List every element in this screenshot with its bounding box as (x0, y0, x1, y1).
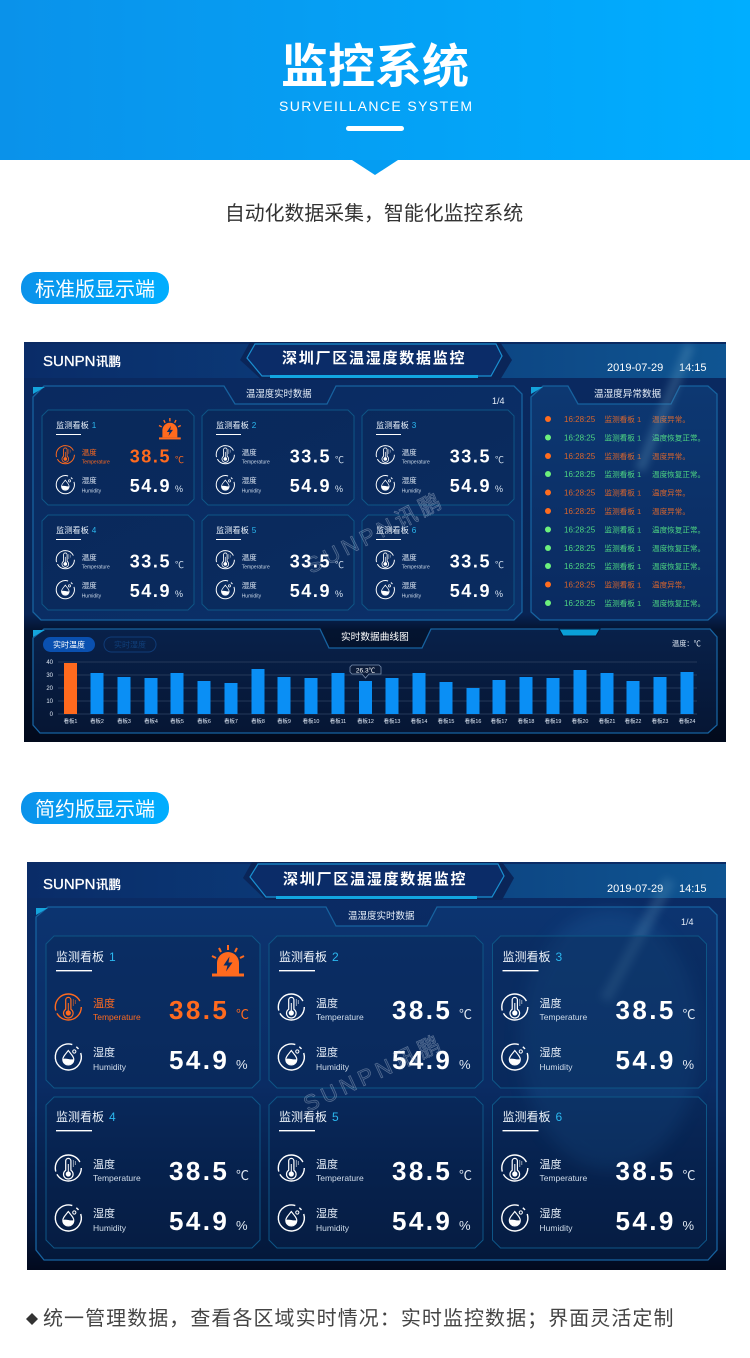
card 6: Temperature (402, 564, 430, 570)
card 4: ℃ (175, 560, 184, 570)
panel: realtime data: 温湿度实时数据 (246, 388, 312, 399)
logo (44, 878, 120, 890)
section pill: simple display: 简约版显示端 (35, 798, 155, 821)
section pill: standard display (21, 272, 169, 304)
log row 8: 温度恢复正常。 (652, 543, 705, 553)
card 4: 湿度 (82, 580, 97, 590)
log row 5: 16:28:25 (564, 488, 596, 498)
log row 2 (545, 434, 700, 442)
large card 4: Temperature (93, 1173, 141, 1183)
date and time: 2019-07-29 (607, 362, 663, 374)
gridlines and axis: 40 (46, 660, 54, 666)
large card 2: Humidity (316, 1062, 350, 1072)
card 5: ℃ (335, 560, 344, 570)
logo (44, 355, 120, 368)
large card 2 (269, 936, 483, 1088)
large card 3: 38.5 (616, 995, 676, 1025)
panel: realtime data large (36, 880, 717, 1260)
log row 10: 16:28:25 (564, 580, 596, 590)
log row 11: 温度恢复正常。 (652, 598, 705, 608)
log row 9: 16:28:25 (564, 562, 596, 571)
bar labels: 看板12 (357, 717, 374, 725)
large card 4 (46, 1097, 260, 1248)
log row 3: 监测看板 1 (604, 451, 641, 461)
large card 3: 监测看板 3 (502, 950, 563, 964)
log row 3: 温度异常。 (652, 451, 690, 461)
card 3: % (495, 484, 503, 494)
subtitle text: 自动化数据采集，智能化监控系统 (225, 202, 523, 225)
large card 2: Temperature (316, 1012, 364, 1022)
logo: SUNPN (43, 353, 96, 370)
card 1: 监测看板 1 (56, 420, 97, 430)
card 2: % (335, 484, 343, 494)
log row 11 (545, 600, 700, 607)
panel: bar chart: 实时数据曲线图 (341, 630, 409, 643)
logo: 讯鹏 (96, 877, 121, 892)
panel: abnormal data list (531, 386, 717, 620)
bar labels: 看板3 (117, 717, 131, 725)
card 5 (202, 515, 354, 610)
log row 6: 温度异常。 (652, 506, 690, 516)
card 6: Humidity (402, 594, 422, 600)
large card 3: ℃ (682, 1007, 696, 1022)
card 2: 温度 (242, 447, 257, 457)
card 1: 38.5 (130, 447, 171, 467)
card 5: Temperature (242, 564, 270, 570)
bar labels: 看板23 (652, 717, 668, 725)
light streak (640, 345, 690, 470)
log row 2: 温度恢复正常。 (652, 432, 705, 442)
bar labels: 看板5 (170, 717, 184, 725)
card 4: Temperature (82, 564, 110, 570)
large card 3: Temperature (540, 1012, 587, 1022)
large card 1: % (236, 1057, 248, 1072)
card 6 (362, 515, 514, 610)
panel: realtime data: 1/4 (492, 396, 505, 406)
section pill: standard display: 标准版显示端 (35, 278, 155, 301)
large card 4: % (236, 1218, 248, 1233)
date and time: 14:15 (679, 362, 707, 374)
large card 3: Humidity (540, 1062, 573, 1072)
section pill: simple display (21, 792, 169, 824)
card 6: 54.9 (450, 581, 491, 601)
icon: alarm (159, 418, 181, 439)
card 4 (42, 515, 194, 610)
large card 1: ℃ (236, 1007, 249, 1022)
large card 1 (46, 936, 260, 1088)
large card 2: ℃ (459, 1007, 472, 1022)
card 1: ℃ (175, 455, 184, 465)
large card 6: Temperature (540, 1173, 587, 1183)
bar labels: 看板11 (330, 717, 346, 725)
panel: realtime data (33, 386, 522, 620)
card 1: 湿度 (82, 475, 97, 485)
large card 1: Temperature (93, 1012, 141, 1022)
log row 6: 16:28:25 (564, 507, 596, 516)
dashboard title plate: 深圳厂区温湿度数据监控 (282, 349, 466, 367)
large card 1: 湿度 (93, 1045, 115, 1059)
card 4: 温度 (82, 552, 97, 562)
large card 4: ℃ (236, 1168, 249, 1183)
large card 5: ℃ (459, 1168, 472, 1183)
large card 4: 湿度 (93, 1206, 115, 1220)
large card 5: 54.9 (392, 1206, 452, 1236)
dashboard title plate (243, 862, 514, 900)
large card 1: Humidity (93, 1062, 127, 1072)
bar labels: 看板14 (411, 717, 427, 725)
tooltip: 26.3℃ (356, 666, 376, 674)
card 5: 33.5 (290, 552, 331, 572)
card 5: % (335, 589, 343, 599)
card 6: 温度 (402, 552, 417, 562)
card 3: ℃ (495, 455, 504, 465)
card 3: 54.9 (450, 476, 491, 496)
log row 11: 16:28:25 (564, 599, 596, 608)
card 6: % (495, 589, 503, 599)
card 1: Humidity (82, 488, 102, 494)
large card 1: 监测看板 1 (56, 950, 116, 964)
panel: abnormal data list: 温湿度异常数据 (594, 388, 662, 400)
bar labels: 看板1 (64, 717, 77, 725)
log row 3 (545, 452, 685, 460)
log row 4: 温度恢复正常。 (652, 469, 705, 479)
log row 9: 监测看板 1 (604, 561, 641, 571)
panel: bar chart (33, 629, 717, 733)
bar labels: 看板21 (599, 717, 615, 725)
gridlines and axis: 10 (46, 699, 54, 705)
log row 5: 监测看板 1 (604, 488, 641, 498)
bar labels: 看板15 (438, 717, 454, 725)
card 5: Humidity (242, 594, 262, 600)
log row 9: 温度恢复正常。 (652, 561, 705, 571)
log row 8: 16:28:25 (564, 544, 596, 553)
large card 4: 38.5 (169, 1156, 229, 1186)
title underline (346, 126, 404, 131)
large card 6: 监测看板 6 (502, 1110, 563, 1124)
card 4: 33.5 (130, 552, 171, 572)
card 4: % (175, 589, 183, 599)
large card 5: 38.5 (392, 1156, 452, 1186)
large card 5 (269, 1097, 483, 1248)
log row 2: 16:28:25 (564, 434, 596, 442)
card 6: 监测看板 6 (376, 525, 417, 535)
date and time: 2019-07-29 (607, 883, 663, 895)
tab buttons: 实时温度 (53, 640, 85, 650)
large card 2: 监测看板 2 (279, 950, 339, 964)
card 2: ℃ (335, 455, 344, 465)
card 2: 监测看板 2 (216, 420, 257, 430)
gridlines and axis (46, 660, 697, 718)
large card 6: % (682, 1218, 694, 1233)
log row 10 (545, 581, 685, 588)
large card 1: 54.9 (169, 1045, 229, 1075)
card 3: Humidity (402, 488, 422, 494)
log row 4: 16:28:25 (564, 470, 596, 479)
bar labels: 看板24 (679, 717, 695, 725)
english subtitle: SURVEILLANCE SYSTEM (279, 98, 472, 114)
card 3: 湿度 (402, 475, 417, 485)
large card 3: 54.9 (616, 1045, 676, 1075)
log row 1: 监测看板 1 (604, 414, 641, 424)
large card 2: 38.5 (392, 995, 452, 1025)
large card 3: 湿度 (540, 1045, 562, 1059)
large card 6: 54.9 (616, 1206, 676, 1236)
bar labels: 看板6 (197, 717, 211, 725)
panel: realtime data large: 1/4 (681, 917, 694, 927)
bar labels: 看板9 (277, 717, 291, 725)
card 2: 33.5 (290, 447, 331, 467)
card 1: Temperature (82, 460, 110, 466)
log row 5 (545, 489, 685, 496)
dashboard: simple display (27, 862, 726, 1270)
large card 6: Humidity (540, 1223, 573, 1233)
large card 5: 湿度 (316, 1206, 338, 1220)
log row 1: 温度异常。 (652, 414, 690, 424)
dashboard: standard display (24, 342, 726, 742)
header band (0, 0, 750, 175)
log row 1: 16:28:25 (564, 415, 596, 424)
bar labels: 看板2 (90, 717, 104, 725)
card 4: Humidity (82, 594, 102, 600)
log row 6: 监测看板 1 (604, 506, 641, 516)
dashboard title plate: 深圳厂区温湿度数据监控 (283, 870, 467, 888)
log row 8: 监测看板 1 (604, 543, 641, 553)
panel: bar chart: 温度：℃ (672, 639, 701, 648)
card 3 (362, 410, 514, 505)
bar labels (64, 718, 696, 724)
log row 7: 16:28:25 (564, 526, 596, 534)
log row 11: 监测看板 1 (604, 598, 641, 608)
bottom note: 统一管理数据，查看各区域实时情况：实时监控数据；界面灵活定制 (43, 1307, 674, 1330)
date and time (608, 364, 706, 371)
large card 4: 温度 (93, 1157, 115, 1171)
large card 4: 监测看板 4 (56, 1110, 116, 1124)
card 6: 湿度 (402, 580, 417, 590)
large card 2: 54.9 (392, 1045, 452, 1075)
large card 6: 38.5 (616, 1156, 676, 1186)
card 4: 54.9 (130, 581, 171, 601)
title: 监控系统 (281, 40, 469, 93)
watermark: SUNPN讯鹏 (302, 489, 445, 578)
dashboard title plate (240, 342, 512, 380)
large card 5: % (459, 1218, 471, 1233)
tab buttons (43, 637, 156, 652)
large card 3: % (682, 1057, 694, 1072)
log row 8 (545, 544, 700, 552)
large card 2: % (459, 1057, 471, 1072)
large card 6 (492, 1097, 706, 1248)
large card 1: 38.5 (169, 995, 229, 1025)
tab buttons: 实时湿度 (114, 640, 146, 650)
icon: alarm (212, 945, 244, 976)
bars (64, 663, 694, 714)
large card 3 (492, 936, 706, 1088)
large card 6: ℃ (682, 1168, 696, 1183)
log row 2: 监测看板 1 (604, 432, 641, 442)
card 4: 监测看板 4 (56, 525, 97, 535)
card 1: 54.9 (130, 476, 171, 496)
card 5: 湿度 (242, 580, 257, 590)
card 6: ℃ (495, 560, 504, 570)
log row 4: 监测看板 1 (604, 469, 641, 479)
bar labels: 看板17 (491, 717, 507, 725)
card 2: 54.9 (290, 476, 331, 496)
log row 5: 温度异常。 (652, 488, 690, 498)
card 1: % (175, 484, 183, 494)
log row 7: 温度恢复正常。 (652, 524, 705, 534)
large card 6: 温度 (540, 1157, 562, 1171)
card 2 (202, 410, 354, 505)
logo: SUNPN (43, 876, 96, 893)
card 2: 湿度 (242, 475, 257, 485)
log row 7: 监测看板 1 (604, 524, 641, 534)
large card 5: Temperature (316, 1173, 364, 1183)
bar labels: 看板4 (144, 717, 158, 725)
bar labels: 看板8 (251, 717, 265, 725)
card 3: Temperature (402, 460, 430, 466)
bar labels: 看板22 (625, 717, 641, 725)
large card 5: 监测看板 5 (279, 1110, 339, 1124)
gridlines and axis: 0 (50, 712, 54, 718)
bar labels: 看板10 (303, 717, 319, 725)
card 5: 温度 (242, 552, 257, 562)
bar labels: 看板19 (545, 717, 561, 725)
date and time (608, 884, 706, 892)
large card 3: 温度 (540, 996, 562, 1010)
gridlines and axis: 20 (46, 686, 54, 692)
log row 10: 监测看板 1 (604, 580, 641, 590)
card 1: 温度 (82, 447, 97, 457)
card 5: 54.9 (290, 581, 331, 601)
log row 4 (545, 470, 700, 478)
card 6: 33.5 (450, 552, 491, 572)
large card 4: Humidity (93, 1223, 127, 1233)
card 1 (42, 410, 194, 505)
large card 5: 温度 (316, 1157, 338, 1171)
card 3: 监测看板 3 (376, 420, 417, 430)
large card 6: 湿度 (540, 1206, 562, 1220)
date and time: 14:15 (679, 883, 707, 895)
panel: realtime data large: 温湿度实时数据 (348, 910, 415, 922)
card 2: Humidity (242, 488, 262, 494)
card 3: 33.5 (450, 447, 491, 467)
logo: 讯鹏 (96, 354, 121, 369)
log row 7 (545, 526, 700, 534)
log row 6 (545, 508, 685, 515)
large card 4: 54.9 (169, 1206, 229, 1236)
log row 3: 16:28:25 (564, 452, 596, 461)
card 3: 温度 (402, 447, 417, 457)
bar labels: 看板7 (224, 717, 238, 725)
log row 10: 温度异常。 (652, 580, 690, 590)
bar labels: 看板16 (465, 717, 481, 725)
large card 5: Humidity (316, 1223, 350, 1233)
log row 1 (545, 416, 685, 423)
large card 2: 温度 (316, 996, 338, 1010)
gridlines and axis: 30 (46, 673, 54, 679)
bar labels: 看板20 (572, 717, 588, 725)
watermark: SUNPN讯鹏 (300, 1031, 444, 1117)
card 2: Temperature (242, 460, 270, 466)
bar labels: 看板13 (384, 717, 400, 725)
card 5: 监测看板 5 (216, 525, 257, 535)
bar labels: 看板18 (518, 717, 534, 725)
tooltip (350, 665, 381, 678)
log row 9 (545, 562, 700, 570)
large card 1: 温度 (93, 996, 115, 1010)
large card 2: 湿度 (316, 1045, 338, 1059)
